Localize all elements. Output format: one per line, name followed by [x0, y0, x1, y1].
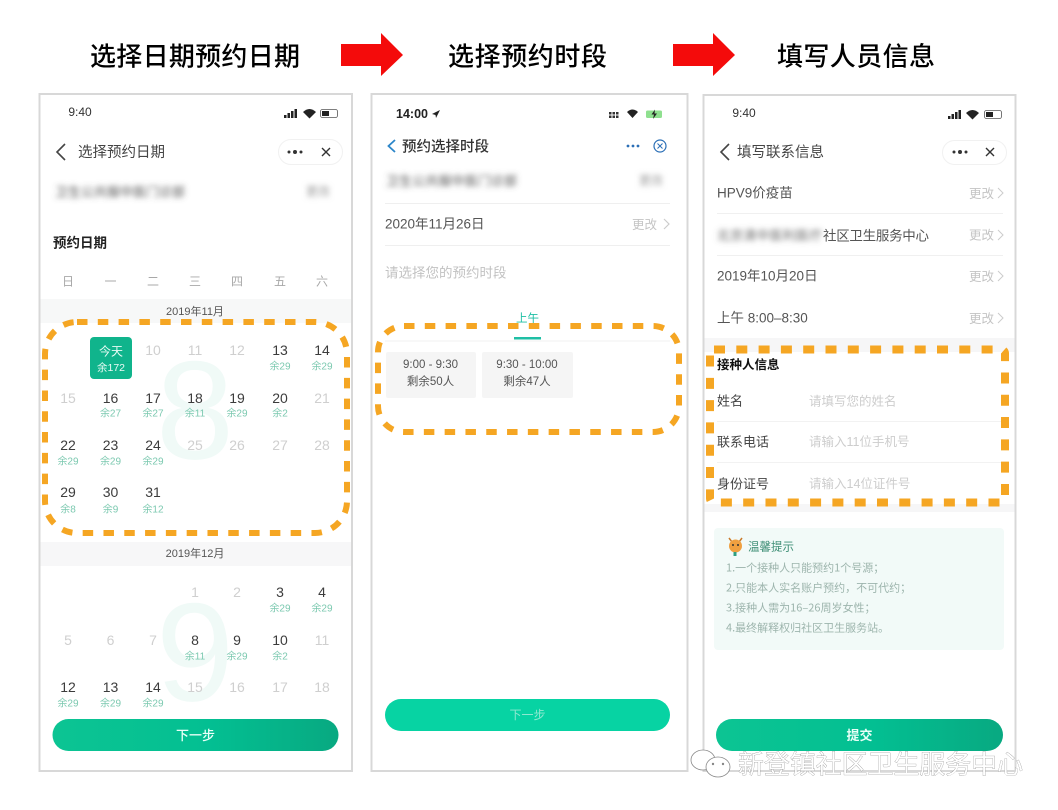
title: step 1: 选择日期预约日期: [90, 36, 300, 74]
calendar: November dates: 21: [314, 390, 330, 406]
heading: fill in contact info: 填写联系信息: [737, 141, 824, 162]
month band: December: [40, 542, 351, 566]
calendar: November dates: 27: [272, 437, 288, 453]
form section band: [704, 338, 1014, 352]
today cell: 余172: [97, 361, 125, 374]
form field: phone: 请输入11位手机号: [809, 434, 909, 449]
slot: 9:00 to 9:30: 9:00 - 9:30: [403, 359, 458, 371]
calendar: November dates: 10: [145, 342, 161, 358]
month band: November: [40, 299, 351, 323]
calendar: December dates: 9: [233, 632, 241, 648]
calendar: December dates: 7: [149, 632, 157, 648]
tips card: [714, 528, 1004, 650]
calendar: December dates: 余2: [272, 650, 288, 662]
calendar: December dates: 17: [272, 679, 288, 695]
navigation: back chevron: [721, 144, 729, 160]
calendar: December dates: 10: [272, 632, 288, 648]
panel: date selection phone screen: [40, 94, 352, 771]
calendar: November dates: 余27: [142, 406, 164, 420]
form heading: recipient info: 接种人信息: [717, 354, 780, 373]
tips list: [726, 560, 911, 636]
icon: deer mascot: [729, 538, 742, 556]
weekday header: 四: [231, 272, 243, 290]
form field: name: [717, 390, 897, 410]
weekday header: 三: [189, 272, 201, 290]
navigation: back chevron: [57, 144, 65, 160]
calendar: December dates: 余29: [142, 696, 164, 710]
calendar: November dates: 余11: [185, 406, 206, 420]
calendar: December dates: 2: [233, 584, 241, 600]
calendar: November dates: 余27: [100, 406, 121, 420]
calendar: November dates: 30: [103, 484, 118, 500]
status bar: icons: [609, 110, 662, 119]
calendar: December dates: 13: [103, 679, 118, 695]
calendar: November dates: 17: [145, 390, 161, 406]
arrow: step 1 to step 2: [341, 33, 403, 76]
title: step 2: 选择预约时段: [448, 36, 607, 74]
capsule menu: [278, 140, 342, 164]
row: health center: 社区卫生服务中心: [823, 224, 930, 244]
slot: 9:30 to 10:00: 9:30 - 10:00: [496, 359, 558, 371]
calendar: December dates: [57, 584, 333, 710]
calendar: November dates: 余29: [311, 360, 333, 372]
row: vaccine: HPV9价疫苗: [717, 186, 793, 200]
month band: December: 2019年12月: [166, 546, 224, 560]
row: date: 更改: [969, 266, 995, 285]
row: selected date: 更改: [632, 214, 658, 233]
calendar: November dates: 15: [60, 390, 76, 406]
blurred clinic name: 卫生公共服中医门诊部: [386, 170, 517, 190]
account name: 新登镇社区卫生服务中心: [738, 744, 1023, 782]
calendar: December dates: 余11: [185, 650, 206, 662]
calendar: December dates: 11: [315, 632, 329, 648]
calendar: November dates: 20: [272, 390, 288, 406]
today cell: [90, 337, 132, 379]
calendar: November dates: 18: [187, 390, 203, 406]
button: submit: [716, 719, 1003, 751]
calendar: November dates: 余29: [226, 406, 248, 420]
tips list: 4.最终解释权归社区卫生服务站。: [726, 620, 889, 636]
row: time: [717, 308, 1003, 327]
calendar: November dates: 11: [188, 342, 202, 358]
calendar: December dates: 6: [107, 632, 115, 648]
calendar: December dates: 8: [191, 632, 199, 648]
calendar: November dates: 12: [229, 342, 245, 358]
calendar: November dates: 22: [60, 437, 76, 453]
title: step 3: 填写人员信息: [777, 36, 935, 74]
tab: morning: 上午: [516, 310, 539, 326]
tips list: 3.接种人需为16–26周岁女性；: [726, 600, 875, 616]
form field: ID number: 请输入14位证件号: [809, 476, 910, 491]
status bar: icons: [284, 109, 338, 118]
status bar: time: 9:40: [732, 106, 756, 120]
form field: phone: [717, 432, 909, 450]
status bar: location arrow: [432, 110, 440, 118]
calendar: December dates: 5: [64, 632, 72, 648]
row: vaccine: [717, 183, 1003, 202]
calendar: November dates: 19: [229, 390, 245, 406]
calendar: November dates: 28: [314, 437, 330, 453]
watermark: WeChat account: [691, 744, 1023, 782]
calendar: December dates: 16: [229, 679, 245, 695]
weekday header: [62, 272, 328, 290]
calendar: November dates: 25: [187, 437, 203, 453]
calendar: November dates: 余29: [100, 454, 121, 468]
button: next step disabled: 下一步: [509, 706, 546, 723]
panel: time slot phone screen: [372, 94, 688, 771]
row: health center: [717, 224, 1003, 244]
navigation: back chevron: [388, 140, 395, 152]
button: submit: 提交: [846, 725, 873, 744]
calendar: December dates: 余29: [100, 696, 121, 710]
calendar: November dates: 14: [314, 342, 330, 358]
footer band of form: [704, 504, 1014, 512]
slot: 9:00 to 9:30: [386, 352, 476, 398]
row: selected date: [385, 214, 669, 233]
weekday header: 六: [316, 272, 328, 290]
heading: select appointment date: 选择预约日期: [78, 141, 165, 162]
month band: November: 2019年11月: [166, 304, 224, 318]
weekday header: 五: [274, 272, 286, 290]
calendar: November dates: [57, 342, 333, 516]
status bar: time: 14:00: [396, 107, 428, 121]
highlight: dashed date range: [45, 322, 347, 533]
heading: choose time slot: 预约选择时段: [402, 136, 489, 156]
arrow: step 2 to step 3: [673, 33, 735, 76]
form field: phone: 联系电话: [717, 432, 769, 450]
highlight: dashed time slots: [378, 326, 679, 432]
row: vaccine: 更改: [969, 183, 995, 202]
calendar: November dates: 23: [103, 437, 118, 453]
weekday header: 一: [104, 272, 117, 290]
row: health center: 更改: [969, 224, 995, 244]
weekday header: 二: [147, 272, 159, 290]
form field: ID number: [717, 474, 910, 492]
row: date: [717, 266, 1003, 285]
heading: appointment date: 预约日期: [53, 232, 107, 252]
slot: 9:00 to 9:30: 剩余50人: [407, 374, 455, 388]
calendar: November dates: 24: [145, 437, 161, 453]
calendar: November dates: 余8: [60, 502, 76, 516]
blurred clinic name: 卫生公共服中医门诊部: [55, 182, 185, 200]
calendar: November dates: 余29: [57, 454, 79, 468]
watermark numeral 9: 9: [156, 574, 234, 730]
slot: 9:30 to 10:00: 剩余47人: [503, 374, 551, 388]
watermark numeral 8: 8: [156, 332, 234, 488]
button: next step disabled: [385, 699, 670, 731]
calendar: November dates: 31: [145, 484, 161, 500]
row: time: 更改: [969, 308, 995, 327]
calendar: November dates: 余9: [103, 502, 119, 516]
calendar: November dates: 13: [272, 342, 288, 358]
calendar: December dates: 1: [191, 584, 199, 600]
row: health center: 北京清中医利医疗: [717, 225, 822, 244]
icon: WeChat bubbles: [691, 750, 730, 777]
calendar: November dates: 29: [60, 484, 76, 500]
calendar: November dates: 16: [103, 390, 118, 406]
form field: name: 请填写您的姓名: [809, 390, 897, 410]
calendar: December dates: 15: [187, 679, 203, 695]
weekday header: 日: [62, 272, 74, 290]
blurred change link: 更改: [306, 182, 330, 200]
calendar: December dates: 3: [276, 584, 284, 600]
calendar: December dates: 余29: [269, 602, 291, 614]
row: time: 上午 8:00–8:30: [717, 310, 808, 326]
calendar: December dates: 18: [314, 679, 330, 695]
button: next step: 下一步: [176, 725, 215, 744]
calendar: November dates: 余2: [272, 406, 288, 420]
status bar: time: 9:40: [68, 105, 92, 119]
calendar: December dates: 余29: [226, 650, 248, 662]
slot: 9:30 to 10:00: [482, 352, 573, 398]
tab: morning: [514, 310, 541, 340]
calendar: December dates: 余29: [311, 602, 333, 614]
status bar: icons: [948, 110, 1002, 120]
hint: choose time slot: 请选择您的预约时段: [385, 262, 506, 282]
form field: ID number: 身份证号: [717, 474, 769, 492]
calendar: November dates: 余29: [269, 360, 291, 372]
blurred change link: 更改: [639, 172, 663, 188]
form field: name: 姓名: [717, 390, 743, 410]
button: next step: [52, 719, 338, 751]
calendar: December dates: 余29: [57, 696, 79, 710]
tips list: 1.一个接种人只能预约1个号源；: [726, 560, 884, 576]
highlight: dashed form fields: [710, 350, 1005, 502]
calendar: November dates: 余29: [142, 454, 164, 468]
calendar: November dates: 余12: [142, 502, 164, 516]
capsule menu: [942, 140, 1006, 164]
menu dots and close: [627, 140, 666, 152]
today cell: 今天: [99, 342, 123, 360]
tips list: 2.只能本人实名账户预约，不可代约；: [726, 580, 911, 596]
row: date: 2019年10月20日: [717, 268, 818, 284]
row: selected date: 2020年11月26日: [385, 216, 485, 232]
calendar: December dates: 4: [318, 584, 326, 600]
calendar: December dates: 14: [145, 679, 161, 695]
tips heading: 温馨提示: [748, 538, 794, 554]
panel: contact info phone screen: [704, 95, 1016, 771]
calendar: December dates: 12: [60, 679, 76, 695]
calendar: November dates: 26: [229, 437, 245, 453]
